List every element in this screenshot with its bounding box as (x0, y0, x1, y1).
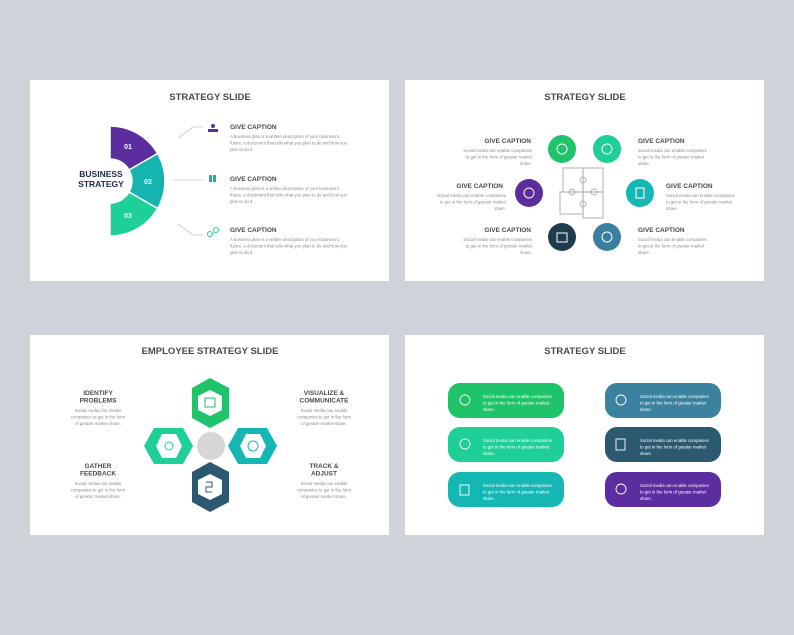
pills: to get in the form of greater market (640, 400, 707, 406)
hexagons (144, 378, 277, 512)
captions: slide 2: GIVE CAPTION (638, 227, 685, 234)
captions: slide 1 (230, 124, 348, 255)
captions: slide 2: Social media can enable companies (437, 193, 506, 198)
captions: slide 2: share. (494, 206, 506, 211)
heading: business strategy: STRATEGY (78, 179, 124, 189)
icons: slide 1 (208, 124, 218, 236)
panel: slide 1 (30, 80, 389, 281)
captions: slide 1: future, a document that tells what you plan to do and how you (230, 140, 348, 146)
text blocks: slide 3: companies to get in the form (297, 414, 352, 420)
text blocks: slide 3: of greater market share. (75, 494, 121, 499)
text blocks: slide 3: companies to get in the form (71, 488, 126, 492)
captions: slide 1: GIVE CAPTION (230, 176, 277, 183)
captions: slide 1: future, a document that tells what you plan to do and how you (230, 244, 348, 248)
heading: business strategy: BUSINESS (79, 169, 123, 179)
pills: Social media can enable companies (483, 438, 552, 443)
captions: slide 2: to get in the form of greater market (638, 244, 705, 248)
captions: slide 2: share. (638, 250, 650, 255)
captions: slide 2: GIVE CAPTION (484, 227, 531, 234)
icon: puzzle (560, 168, 603, 218)
captions: slide 2: Social media can enable companies (463, 148, 532, 153)
captions: slide 2: Social media can enable companies (666, 193, 735, 198)
captions: slide 1: A business plan is a written description of your business's (230, 237, 339, 242)
captions: slide 1: plan to do it. (230, 199, 253, 204)
captions: slide 1: plan to do it. (230, 250, 253, 255)
chart: semi donut: 02 (144, 179, 152, 186)
pills: share. (483, 451, 495, 456)
title: slide 3: EMPLOYEE STRATEGY SLIDE (142, 346, 278, 357)
captions: slide 1: future, a document that tells what you plan to do and how you (230, 192, 348, 198)
captions: slide 1: A business plan is a written description of your business's (230, 134, 339, 139)
pills: Social media can enable companies (640, 483, 709, 488)
chart: semi donut: 03 (124, 213, 132, 220)
pills: Social media can enable companies (483, 483, 552, 488)
pills: Social media can enable companies (640, 394, 709, 399)
pills: Social media can enable companies (640, 438, 709, 443)
text blocks: slide 3: Social media can enable (301, 481, 348, 486)
pills: to get in the form of greater market (483, 444, 550, 450)
title: slide 4: STRATEGY SLIDE (544, 346, 626, 357)
captions: slide 2: Social media can enable companies (463, 237, 532, 242)
text blocks: slide 3: of greater market share. (75, 421, 121, 426)
captions: slide 2: to get in the form of greater market (666, 200, 733, 204)
text blocks: slide 3: PROBLEMS (80, 398, 117, 404)
captions: slide 2: GIVE CAPTION (456, 183, 503, 190)
chart: semi donut (110, 126, 165, 236)
title: slide 1: STRATEGY SLIDE (169, 92, 251, 103)
captions: slide 2 (437, 138, 735, 255)
text blocks: slide 3: Social media can enable (301, 408, 348, 413)
captions: slide 2: to get in the form of greater market (440, 200, 507, 204)
text blocks: slide 3: companies to get in the form (297, 488, 352, 492)
panel: slide 3 (30, 335, 389, 535)
captions: slide 1: GIVE CAPTION (230, 227, 277, 234)
pills: to get in the form of greater market (483, 490, 550, 494)
text blocks: slide 3: companies to get in the form (71, 414, 126, 420)
pills: share. (483, 407, 495, 412)
pills: share. (640, 451, 652, 456)
captions: slide 1: plan to do it. (230, 147, 253, 152)
text blocks: slide 3: Social media can enable (75, 408, 122, 413)
captions: slide 2: to get in the form of greater market (466, 244, 533, 248)
pills: to get in the form of greater market (483, 400, 550, 406)
pills: Social media can enable companies (483, 394, 552, 399)
chart: semi donut: 01 (124, 144, 132, 151)
text blocks: slide 3: ADJUST (311, 470, 337, 478)
text blocks: slide 3: of greater market share. (301, 421, 347, 426)
captions: slide 2: Social media can enable companies (638, 237, 707, 242)
captions: slide 1: A business plan is a written description of your business's (230, 186, 339, 191)
text blocks: slide 3: IDENTIFY (83, 390, 113, 397)
panel: slide 4 (405, 335, 764, 535)
title: slide 2: STRATEGY SLIDE (544, 92, 626, 103)
text blocks: slide 3: of greater market share. (301, 494, 347, 499)
captions: slide 2: Social media can enable companies (638, 148, 707, 153)
captions: slide 2: share. (520, 161, 532, 166)
captions: slide 2: share. (666, 206, 678, 211)
text blocks: slide 3: FEEDBACK (80, 470, 116, 478)
captions: slide 2: to get in the form of greater market (466, 154, 533, 160)
text blocks: slide 3: COMMUNICATE (300, 398, 349, 404)
panel: slide 2 (405, 80, 764, 281)
captions: slide 2: GIVE CAPTION (638, 138, 685, 145)
captions: slide 2: share. (520, 250, 532, 255)
pills: share. (640, 496, 652, 501)
text blocks: slide 3: TRACK & (309, 463, 339, 470)
pills: to get in the form of greater market (640, 490, 707, 494)
icon circles (515, 135, 654, 251)
pills (448, 383, 721, 507)
text blocks: slide 3: VISUALIZE & (304, 390, 345, 397)
text blocks: slide 3 (71, 390, 352, 499)
pills: share. (640, 407, 652, 412)
captions: slide 2: GIVE CAPTION (666, 183, 713, 190)
text blocks: slide 3: Social media can enable (75, 481, 122, 486)
captions: slide 2: to get in the form of greater market (638, 154, 705, 160)
connector lines (173, 127, 203, 235)
pills: share. (483, 496, 495, 501)
captions: slide 2: GIVE CAPTION (484, 138, 531, 145)
pills: to get in the form of greater market (640, 444, 707, 450)
center circle (197, 432, 225, 460)
text blocks: slide 3: GATHER (85, 463, 112, 470)
captions: slide 1: GIVE CAPTION (230, 124, 277, 131)
captions: slide 2: share. (638, 161, 650, 166)
